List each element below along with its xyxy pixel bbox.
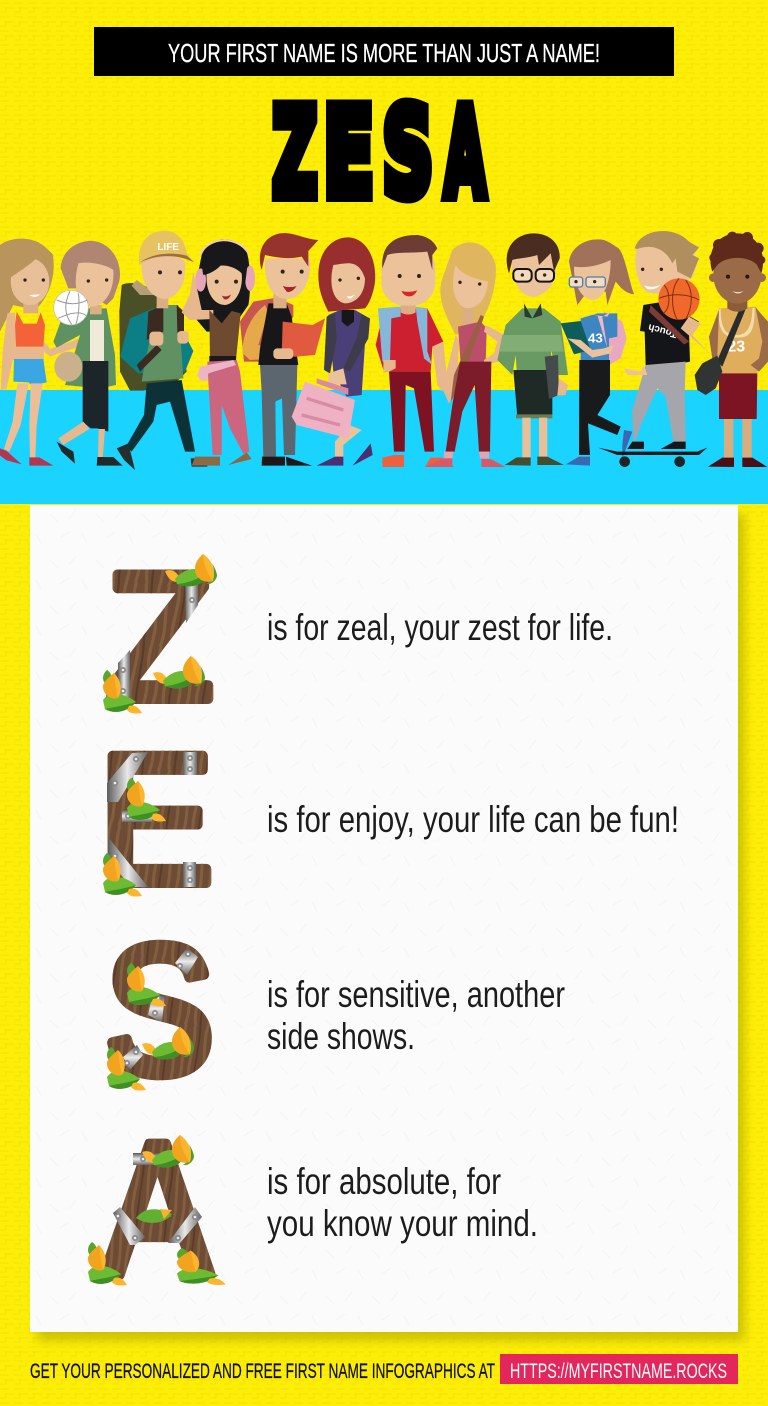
header banner [94,27,674,76]
title: ZESA: S [382,84,433,224]
header banner: YOUR FIRST NAME IS MORE THAN JUST A NAME! [168,38,600,68]
icon: wooden letter E: E [98,716,214,923]
icon: wooden letter Z: Z [106,535,214,737]
person: girl with headphones [182,240,255,466]
person: boy with backpack and cap: LIFE [157,242,179,253]
text: S lines [267,974,565,1057]
person: boy in glasses with green sweater [497,233,568,466]
group of twelve cartoon people, right half [376,231,768,467]
row: letter S [105,907,565,1112]
title: ZESA: Z [272,83,317,224]
person: girl with volleyball [53,241,123,466]
person: boy with red book [240,233,325,466]
row: letter Z [103,535,613,737]
person: ponytail girl with tablet: 43 [588,330,603,345]
blue floor band [0,390,768,504]
text: A lines: is for absolute, for [267,1161,501,1202]
person: blonde girl with sash [425,242,507,467]
footer call to action: GET YOUR PERSONALIZED AND FREE FIRST NAME INFOGRAPHICS AT [30,1360,495,1383]
person: ponytail girl with tablet [561,239,634,466]
footer url badge [500,1354,738,1384]
person: red-haired girl with pink bag [292,237,375,466]
icon: wooden letter Z: Z [106,535,214,737]
white content panel [30,505,745,1341]
title: ZESA: E [324,83,374,224]
row: letter A [88,1104,538,1314]
text: S lines: is for sensitive, another [267,974,565,1015]
row: letter E [98,716,679,923]
text: S lines: side shows. [267,1016,415,1057]
icon: wooden letter E: E [98,716,214,923]
icon: wooden letter S: S [105,907,214,1112]
person: curly-haired boy with bag: 23 [727,339,745,356]
group of twelve cartoon people, left half [0,231,375,470]
text: Z line: is for zeal, your zest for life. [267,607,613,648]
person: skateboarder with basketball: Touch [647,321,678,339]
person: skateboarder with basketball [598,231,712,467]
person: boy in red t-shirt [376,235,454,467]
title: ZESA [272,83,486,225]
person: boy with backpack and cap [117,231,207,470]
icon: wooden letter A: A [104,1104,211,1314]
icon: wooden letter S: S [105,907,214,1112]
title: ZESA: A [444,84,486,225]
person: girl in orange top [0,239,82,466]
icon: wooden letter A: A [104,1104,211,1314]
person: curly-haired boy with bag [695,232,768,467]
text: A lines [267,1161,538,1244]
text: A lines: you know your mind. [267,1203,538,1244]
